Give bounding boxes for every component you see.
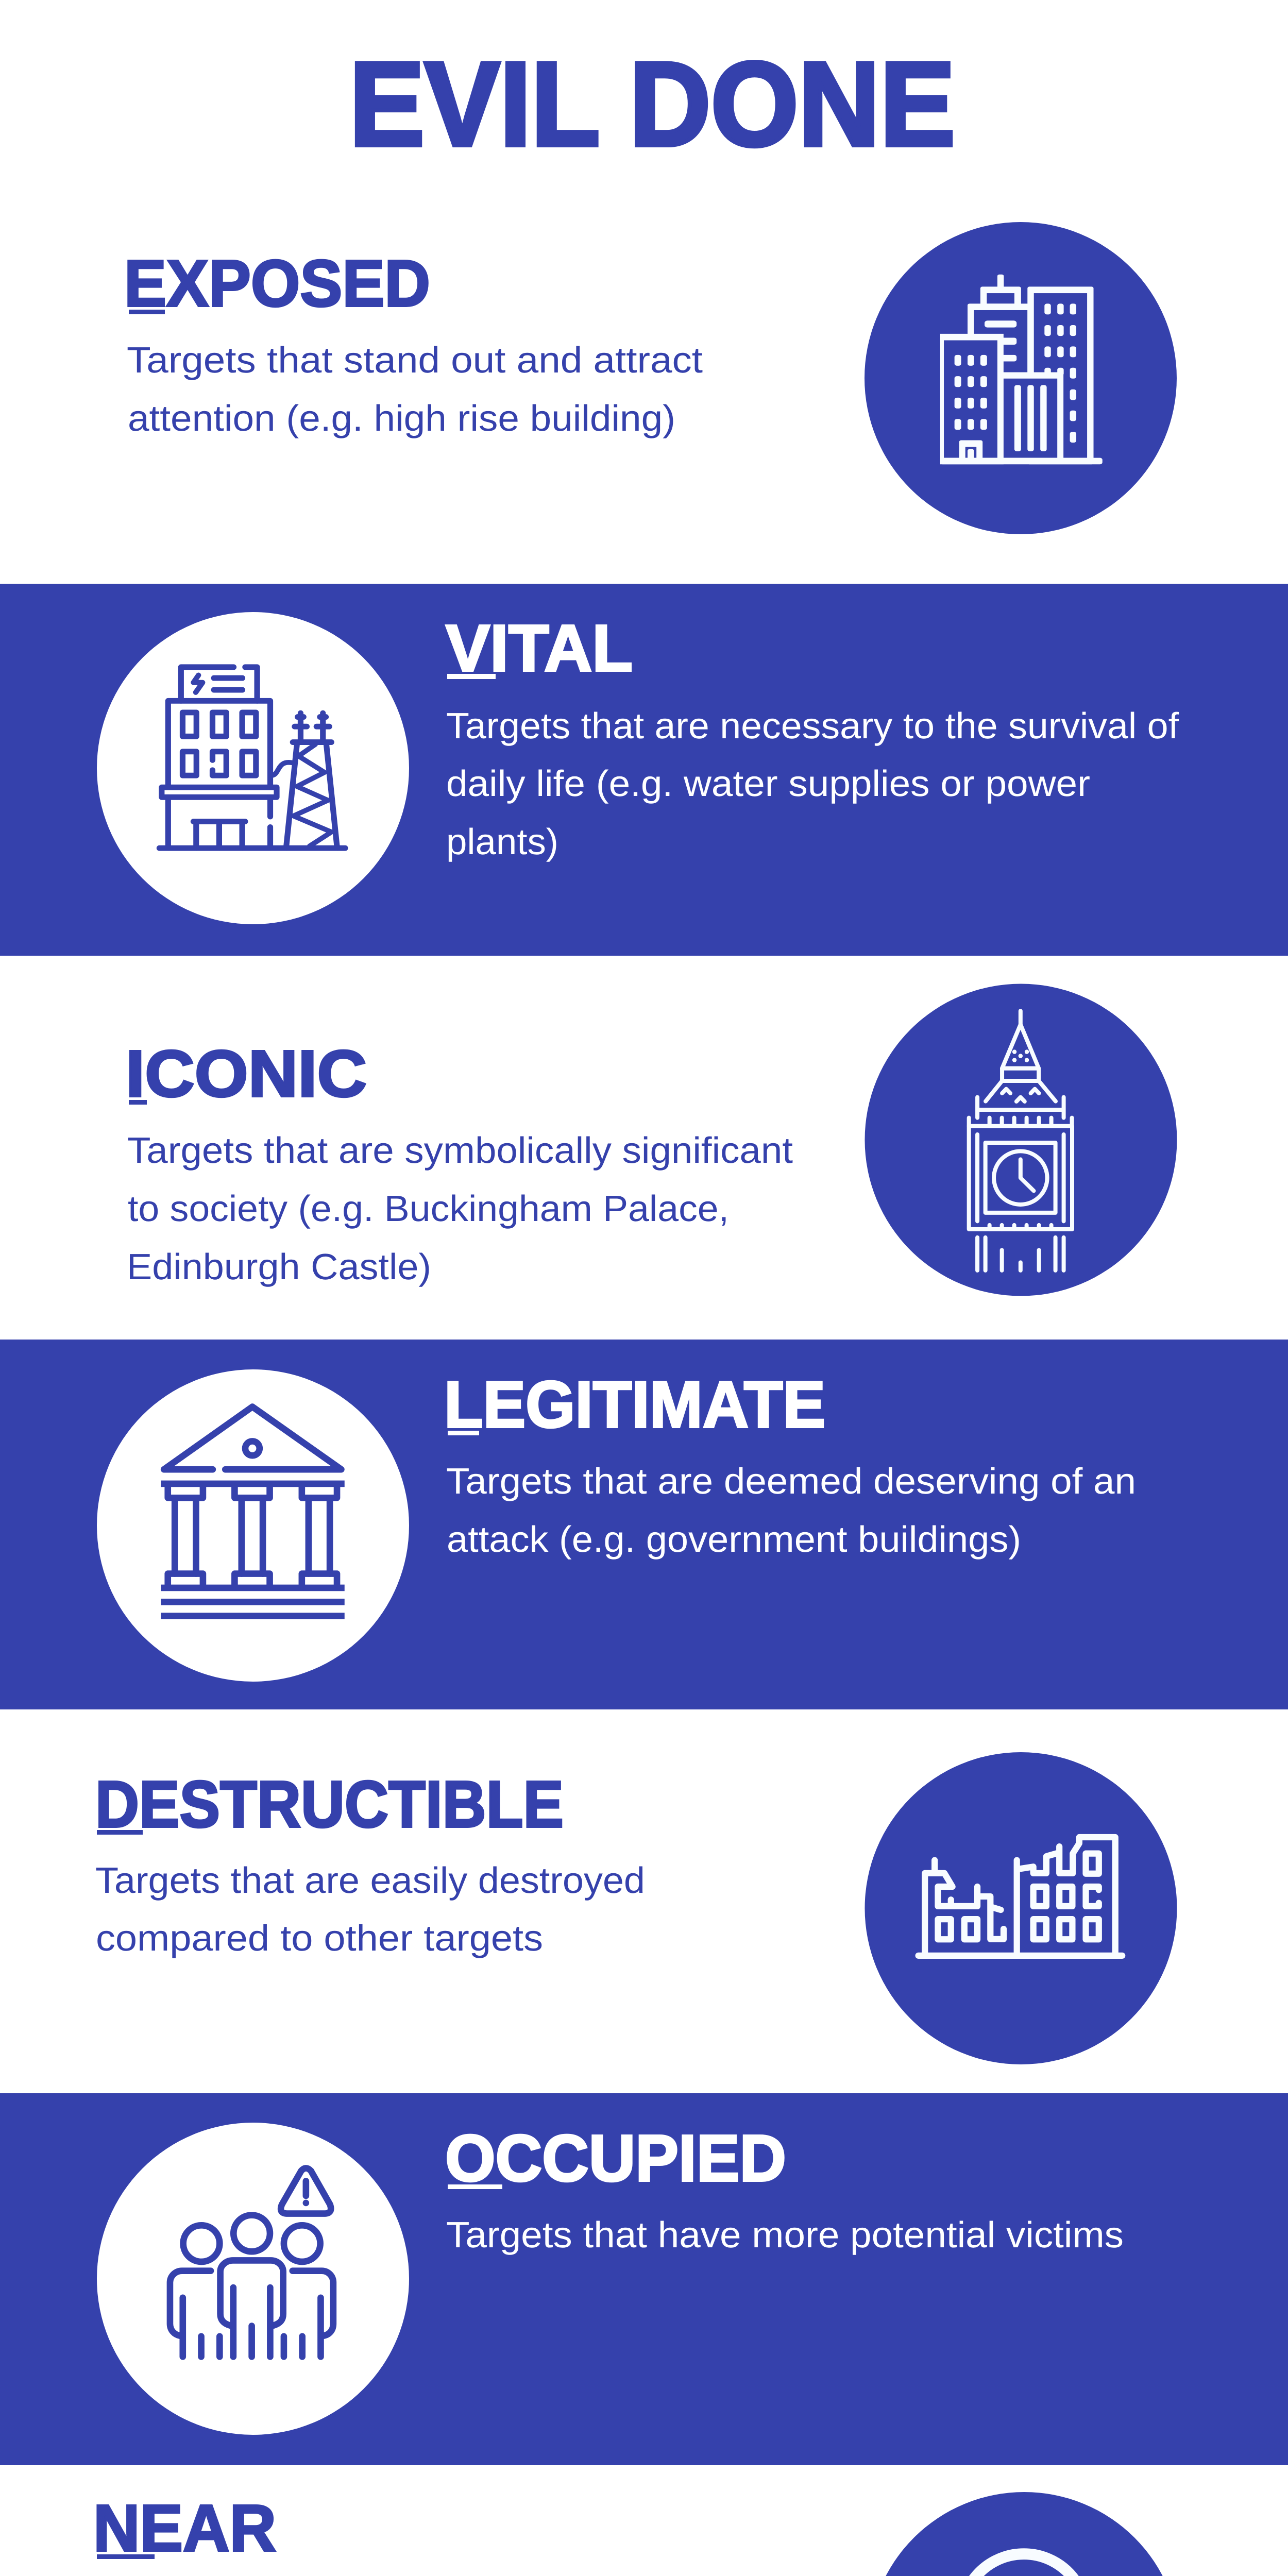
heading: occupied: OCCUPIED [445,2122,786,2195]
text: destructible description [95,1860,645,1959]
text: occupied description: Targets that have more potential victims [446,2215,1124,2256]
icon: power plant and pylon [97,612,409,924]
panel: iconic [126,984,1177,1296]
text: destructible description: Targets that are easily destroyed [95,1860,645,1901]
panel: vital [0,584,1288,956]
panel: legitimate [0,1340,1288,1709]
text: iconic description: to society (e.g. Buckingham Palace, [128,1189,729,1229]
panel: near [93,2492,1180,2576]
text: iconic description: Targets that are symbolically significant [127,1130,793,1171]
text: legitimate description: Targets that are deemed deserving of an [446,1461,1136,1502]
icon: group of people with warning [97,2123,409,2435]
panel: destructible [95,1752,1177,2064]
text: vital description: daily life (e.g. water supplies or power [446,764,1090,804]
text: vital description [446,706,1179,862]
heading: iconic: ICONIC [126,1037,367,1111]
text: iconic description: Edinburgh Castle) [127,1247,431,1287]
icon: government building [97,1369,409,1682]
text: legitimate description: attack (e.g. government buildings) [447,1519,1021,1560]
text: vital description: Targets that are necessary to the survival of [446,706,1179,747]
heading: destructible: DESTRUCTIBLE [95,1768,564,1841]
icon: high rise buildings [865,222,1177,534]
icon: destroyed buildings [865,1752,1177,2064]
text: exposed description: Targets that stand out and attract [127,340,703,381]
title: EVIL DONE [349,38,955,171]
heading: vital: VITAL [446,612,633,685]
heading: near: NEAR [93,2492,276,2565]
text: exposed description: attention (e.g. high rise building) [128,398,675,439]
icon: clock tower [865,984,1177,1296]
icon: location pin [868,2492,1180,2576]
text: destructible description: compared to other targets [96,1918,543,1959]
panel: occupied [0,2093,1288,2465]
heading: legitimate: LEGITIMATE [444,1368,825,1442]
text: legitimate description [446,1461,1136,1560]
text: exposed description [127,340,703,439]
text: vital description: plants) [446,822,558,862]
heading: exposed: EXPOSED [124,247,430,320]
text: iconic description [127,1130,793,1287]
panel: exposed [124,222,1177,534]
